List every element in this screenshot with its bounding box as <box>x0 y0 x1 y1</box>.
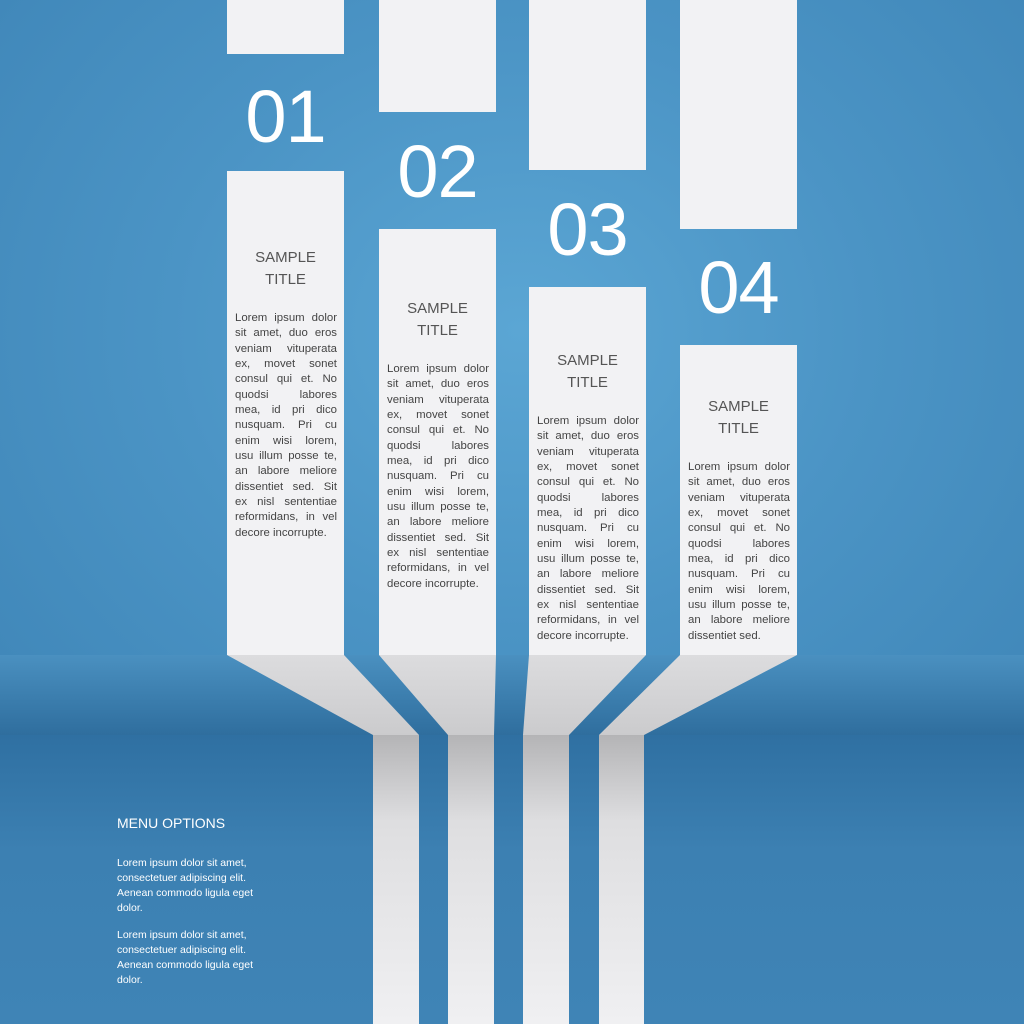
column 04: Pri <box>751 568 765 580</box>
column 01: illum <box>259 450 282 462</box>
column 01: nisl <box>257 496 274 508</box>
column 01: consul <box>235 373 268 385</box>
column 01: quodsi <box>235 389 269 401</box>
column 01: usu <box>235 450 253 462</box>
column 03: duo <box>591 430 610 442</box>
menu options block: dolor. <box>117 974 143 986</box>
column 03: in <box>608 614 617 626</box>
column 03: consul <box>537 476 570 488</box>
column 03: usu <box>537 553 555 565</box>
column 02: qui <box>429 424 444 436</box>
column 01: Sit <box>324 481 337 493</box>
column 03: dico <box>618 507 639 519</box>
column 02: id <box>424 455 433 467</box>
column 02: eros <box>467 378 489 390</box>
column 03: lorem, <box>607 538 639 550</box>
column 02: movet <box>416 409 447 421</box>
column 03: 03 <box>547 188 628 271</box>
column 02: lorem, <box>457 486 489 498</box>
column 03: sed. <box>595 584 616 596</box>
column 03: veniam <box>537 446 574 458</box>
column 04: eros <box>768 476 790 488</box>
column 01: dolor <box>312 312 337 324</box>
column 03: sententiae <box>586 599 639 611</box>
column 02: sed. <box>445 532 466 544</box>
column 01: SAMPLE <box>255 249 316 266</box>
column 03: pri <box>594 507 607 519</box>
column 02: Pri <box>450 470 464 482</box>
menu options block: dolor. <box>117 902 143 914</box>
column 01: meliore <box>300 465 337 477</box>
column 03: dissentiet <box>537 584 585 596</box>
column 01: veniam <box>235 343 272 355</box>
column 01: dissentiet <box>235 481 283 493</box>
column 01: an <box>235 465 248 477</box>
column 03: No <box>624 476 639 488</box>
menu options block: Aenean commodo ligula eget <box>117 887 253 899</box>
column 02: dico <box>468 455 489 467</box>
column 01: ipsum <box>274 312 305 324</box>
column 03: sonet <box>611 461 639 473</box>
column 02: illum <box>411 501 434 513</box>
column 04: ex, <box>688 507 703 519</box>
column 04: SAMPLE <box>708 398 769 415</box>
column 03: dolor <box>614 415 639 427</box>
column 02: posse <box>440 501 471 513</box>
column 04: et. <box>754 522 767 534</box>
column 04: illum <box>712 599 736 611</box>
column 04: Lorem <box>688 461 720 473</box>
column 04: te, <box>777 599 790 611</box>
column 01: in <box>306 511 315 523</box>
column 02: vituperata <box>439 394 489 406</box>
column 01 <box>227 0 344 655</box>
column 01: Lorem <box>235 312 267 324</box>
column 03: nusquam. <box>537 522 587 534</box>
column 01: sonet <box>309 358 337 370</box>
column 03: ex, <box>537 461 552 473</box>
column 01: 01 <box>245 75 326 158</box>
column 02: pri <box>444 455 457 467</box>
column 03: id <box>574 507 583 519</box>
column 01: eros <box>315 327 337 339</box>
column 03: enim <box>537 538 562 550</box>
column 02: ipsum <box>426 363 457 375</box>
column 01: labores <box>300 389 337 401</box>
column 03: Pri <box>600 522 614 534</box>
column 02: sonet <box>461 409 489 421</box>
column 04: labore <box>711 614 742 626</box>
column 04: sonet <box>762 507 790 519</box>
column 02: sententiae <box>436 547 489 559</box>
column 02: nisl <box>409 547 426 559</box>
menu options block <box>117 815 253 986</box>
column 02: sit <box>387 378 398 390</box>
column 04: quodsi <box>688 538 722 550</box>
column 01: nusquam. <box>235 419 285 431</box>
menu options block: consectetuer adipiscing elit. <box>117 944 246 956</box>
menu options block: consectetuer adipiscing elit. <box>117 872 246 884</box>
column 01: duo <box>289 327 308 339</box>
column 04 <box>680 0 797 655</box>
column 04: cu <box>778 568 790 580</box>
column 04: id <box>725 553 734 565</box>
column 02: Lorem <box>387 363 419 375</box>
column 02: SAMPLE <box>407 300 468 317</box>
column 04: lorem, <box>758 584 790 596</box>
column 02: duo <box>441 378 460 390</box>
column 03: an <box>537 568 550 580</box>
column 02: Sit <box>476 532 489 544</box>
column 04: veniam <box>688 492 725 504</box>
column 02 <box>379 0 496 655</box>
column 02: mea, <box>387 455 412 467</box>
column 01: vel <box>322 511 337 523</box>
column 02: ex, <box>387 409 402 421</box>
column 03: meliore <box>602 568 639 580</box>
column 01: ex, <box>235 358 250 370</box>
column 03: Lorem <box>537 415 569 427</box>
column 01: sententiae <box>284 496 337 508</box>
column 03: eros <box>617 430 639 442</box>
column 04: movet <box>717 507 748 519</box>
column 04: dissentiet sed. <box>688 630 761 642</box>
column 03: movet <box>566 461 597 473</box>
lower floor <box>0 735 1024 1024</box>
column 01: amet, <box>253 327 282 339</box>
column 02: in <box>458 562 467 574</box>
menu options block: Aenean commodo ligula eget <box>117 959 253 971</box>
column 04: consul <box>688 522 721 534</box>
column 02: enim <box>387 486 412 498</box>
menu options block: Lorem ipsum dolor sit amet, <box>117 857 247 869</box>
column 02: usu <box>387 501 405 513</box>
column 04: qui <box>730 522 745 534</box>
column 03: TITLE <box>567 374 608 391</box>
column 04: nusquam. <box>688 568 738 580</box>
menu options block: Lorem ipsum dolor sit amet, <box>117 929 247 941</box>
column 01: sit <box>235 327 246 339</box>
column 01: movet <box>264 358 295 370</box>
column 03: sit <box>537 430 548 442</box>
column 02: labores <box>452 440 489 452</box>
column 02: dissentiet <box>387 532 435 544</box>
column 01: No <box>322 373 337 385</box>
column 01: id <box>272 404 281 416</box>
column 03: decore incorrupte. <box>537 630 629 642</box>
column 03: mea, <box>537 507 562 519</box>
column 04: meliore <box>753 614 790 626</box>
column 04: TITLE <box>718 420 759 437</box>
column 03: nisl <box>559 599 576 611</box>
column 02: an <box>387 516 400 528</box>
column 04: sit <box>688 476 699 488</box>
column 02: vel <box>474 562 489 574</box>
column 02: te, <box>476 501 489 513</box>
column 04: 04 <box>698 246 779 329</box>
column 03: qui <box>579 476 594 488</box>
column 02: labore <box>410 516 441 528</box>
column 02: wisi <box>425 486 444 498</box>
column 01: posse <box>288 450 319 462</box>
column 02: quodsi <box>387 440 421 452</box>
column 04: pri <box>745 553 758 565</box>
column 01: enim <box>235 435 260 447</box>
column 03: ipsum <box>576 415 607 427</box>
column 01: cu <box>325 419 337 431</box>
column 01: dico <box>316 404 337 416</box>
column 03: vel <box>624 614 639 626</box>
column 01: decore incorrupte. <box>235 527 327 539</box>
column 03: SAMPLE <box>557 352 618 369</box>
column 03: et. <box>603 476 616 488</box>
column 04: dico <box>769 553 790 565</box>
column 03: quodsi <box>537 492 571 504</box>
column 03: labore <box>560 568 591 580</box>
column 02: 02 <box>397 130 478 213</box>
column 02: No <box>474 424 489 436</box>
column 04: an <box>688 614 701 626</box>
column 02: dolor <box>464 363 489 375</box>
column 02: cu <box>477 470 489 482</box>
column 02: et. <box>453 424 466 436</box>
column 04: dolor <box>765 461 790 473</box>
column 02: nusquam. <box>387 470 437 482</box>
column 03: reformidans, <box>537 614 600 626</box>
menu options block: MENU OPTIONS <box>117 815 225 831</box>
column 01: wisi <box>273 435 292 447</box>
column 03: labores <box>602 492 639 504</box>
column 02: decore incorrupte. <box>387 578 479 590</box>
column 01: sed. <box>293 481 314 493</box>
column 02: reformidans, <box>387 562 450 574</box>
column 01: qui <box>277 373 292 385</box>
column 04: No <box>775 522 790 534</box>
column 02: consul <box>387 424 420 436</box>
column 04: mea, <box>688 553 713 565</box>
column 01: labore <box>258 465 289 477</box>
column 03: Sit <box>626 584 639 596</box>
column 02: TITLE <box>417 322 458 339</box>
column 04: usu <box>688 599 706 611</box>
column 02: ex <box>387 547 399 559</box>
column 02: amet, <box>405 378 434 390</box>
column 04: labores <box>753 538 790 550</box>
column 04: wisi <box>726 584 745 596</box>
column 03: illum <box>561 553 584 565</box>
column 01: pri <box>292 404 305 416</box>
column 04: ipsum <box>727 461 758 473</box>
column 04: enim <box>688 584 713 596</box>
column 03: posse <box>590 553 621 565</box>
column 01: TITLE <box>265 271 306 288</box>
column 04: duo <box>742 476 761 488</box>
column 01: mea, <box>235 404 260 416</box>
column 04: posse <box>741 599 772 611</box>
column 03: te, <box>626 553 639 565</box>
floor band <box>0 655 1024 735</box>
column 01: te, <box>324 450 337 462</box>
column 03: wisi <box>575 538 594 550</box>
column 01: ex <box>235 496 247 508</box>
column 04: amet, <box>706 476 735 488</box>
column 02: veniam <box>387 394 424 406</box>
column 02: meliore <box>452 516 489 528</box>
column 01: lorem, <box>305 435 337 447</box>
column 03: cu <box>627 522 639 534</box>
column 03: vituperata <box>589 446 639 458</box>
column 01: et. <box>301 373 314 385</box>
column 03 <box>529 0 646 655</box>
column 01: vituperata <box>287 343 337 355</box>
column 04: vituperata <box>740 492 790 504</box>
column 01: reformidans, <box>235 511 298 523</box>
column 03: amet, <box>555 430 584 442</box>
column 01: Pri <box>298 419 312 431</box>
column 03: ex <box>537 599 549 611</box>
